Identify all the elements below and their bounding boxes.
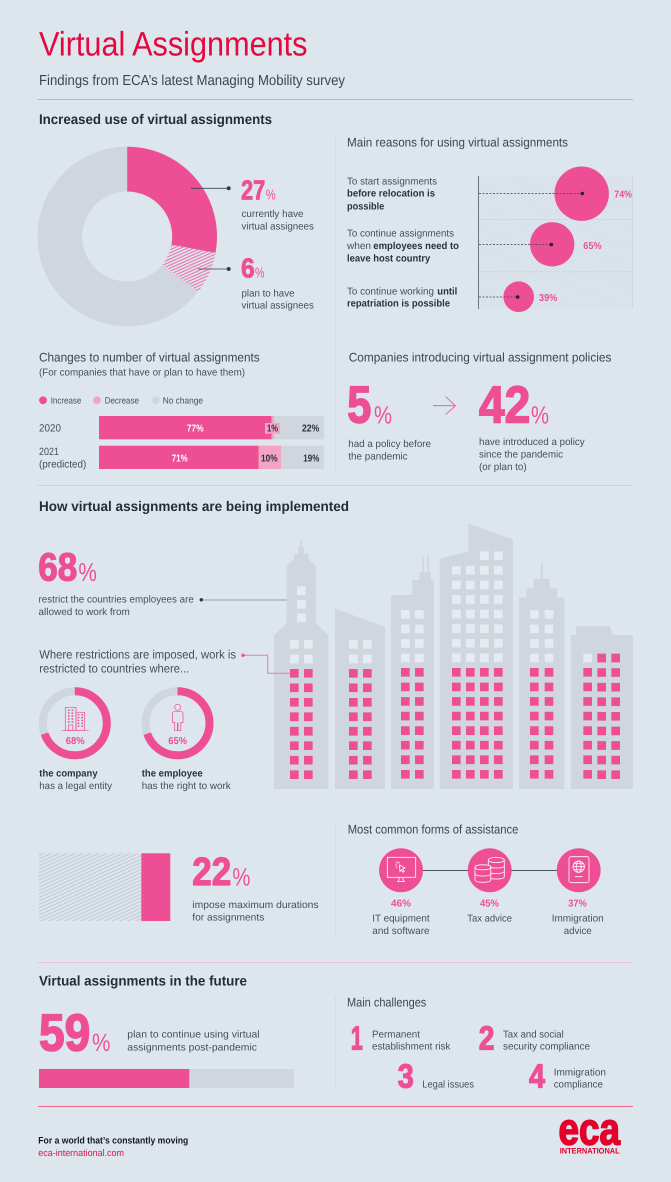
bubble 74%: 74% (614, 190, 632, 201)
icon: monitor (387, 857, 416, 882)
bar 2021: 2021 (39, 446, 59, 458)
item: immigration advice: advice (564, 926, 592, 937)
stat: 6%: virtual assignees (242, 301, 314, 312)
ring: the company 68%: 68% (66, 736, 85, 747)
reason 2 text: leave host country (347, 253, 431, 264)
icon: passport (569, 857, 589, 883)
icon: person (172, 704, 183, 731)
donut segment 27% (127, 147, 217, 253)
challenge 3: Legal issues (422, 1080, 474, 1091)
challenge 2: security compliance (503, 1042, 590, 1053)
stat: 22% (192, 850, 319, 924)
challenge 1: Permanent (372, 1029, 420, 1040)
challenge 1 (351, 1021, 451, 1058)
stat: 59% (39, 1004, 260, 1062)
stat: 42% (479, 377, 585, 473)
bar 2020: 77% (187, 424, 204, 434)
item: immigration advice: 37% (568, 898, 587, 909)
heading: policies: Companies introducing virtual assignment policies (349, 351, 611, 365)
heading: main reasons: Main reasons for using virtual assignments (347, 136, 568, 150)
stat: 5%: 5 (347, 377, 371, 435)
stat: 6% (241, 253, 314, 312)
heading: assistance: Most common forms of assistance (348, 822, 518, 836)
stat: 22%: for assignments (192, 913, 264, 924)
stat: 22%: impose maximum durations (192, 900, 319, 911)
stat: 59%: 59 (39, 1004, 90, 1062)
item: tax advice: 45% (480, 898, 499, 909)
panel: donut chart (37, 147, 230, 326)
text: where restrictions (39, 647, 236, 675)
stat: 42%: have introduced a policy (479, 437, 585, 448)
stat: 68% restrict countries: 68 (38, 546, 77, 590)
stat: 22%: % (232, 863, 250, 891)
stat: 6%: % (255, 266, 265, 282)
reason 1 text: before relocation is (347, 189, 435, 200)
stat: 59%: % (92, 1029, 110, 1057)
text: where restrictions: restricted to countries where... (39, 661, 189, 675)
bar 2020: 22% (302, 424, 319, 434)
reason 1 text: possible (347, 201, 385, 212)
bar 2021 (39, 446, 324, 470)
reason 2 text: To continue assignments (347, 229, 454, 240)
ring: the employee 65%: the employee (142, 769, 203, 780)
ring: the employee 65%: has the right to work (142, 781, 232, 792)
bubble chart (478, 166, 633, 312)
stat: 22%: 22 (192, 850, 231, 894)
stat: 27%: 27 (241, 174, 265, 205)
heading: future: Virtual assignments in the future (39, 972, 247, 988)
stat: 42%: 42 (479, 377, 530, 435)
reason 3 text: To continue working (347, 286, 434, 297)
stat: 59%: assignments post-pandemic (127, 1043, 257, 1054)
subtitle: Findings from ECA’s latest Managing Mobility survey (39, 73, 346, 89)
bar 2020: 2020 (39, 423, 61, 435)
item: IT equipment: 46% (391, 898, 411, 909)
stat: 42%: since the pandemic (479, 449, 563, 460)
stat: 5%: the pandemic (348, 451, 408, 462)
legend: Increase (51, 395, 81, 405)
bubble 74% (479, 166, 632, 221)
heading: increased use: Increased use of virtual assignments (39, 111, 272, 127)
item: tax advice (467, 848, 512, 925)
illustration: city skyline (274, 524, 633, 789)
leader 27% (191, 187, 230, 190)
bar 2021: (predicted) (39, 458, 86, 470)
stat: 5%: had a policy before (348, 439, 431, 450)
stat: 68% restrict countries: allowed to work from (38, 607, 130, 618)
bar 2020: 1% (267, 424, 278, 434)
ring: the company 68% (39, 691, 112, 792)
panel: changes to number (39, 351, 324, 470)
challenge 1: establishment risk (372, 1042, 451, 1053)
item: immigration advice: Immigration (552, 914, 604, 925)
bubble 65% (479, 222, 602, 266)
arrow (433, 397, 455, 414)
donut remainder (37, 147, 217, 326)
donut segment 6% (163, 245, 216, 292)
item: IT equipment (372, 848, 430, 937)
stat: 6%: 6 (241, 253, 255, 284)
stat: 68% restrict countries (38, 546, 194, 618)
logo: ECA International: eca (558, 1104, 621, 1154)
leader 6% (198, 267, 230, 271)
stat: 42%: % (531, 401, 549, 429)
challenge 4: 4 (529, 1059, 545, 1096)
heading: challenges: Main challenges (347, 996, 426, 1010)
stat: 27%: virtual assignees (242, 222, 314, 232)
subheading: changes: (For companies that have or plan to have them) (39, 368, 245, 379)
challenge 2: 2 (479, 1021, 494, 1058)
progress bar 59% (39, 1069, 294, 1088)
challenge 2: Tax and social (503, 1029, 564, 1040)
panel: forms of assistance (348, 822, 604, 937)
icon: coins (475, 857, 504, 882)
legend (39, 395, 203, 405)
stat: 27% (241, 174, 314, 232)
reason 2 text: when (346, 241, 371, 252)
legend: Decrease (105, 395, 139, 405)
bar 2020 (39, 416, 324, 439)
panel: companies introducing policies (347, 351, 611, 473)
bubble 39%: 39% (539, 293, 557, 304)
stat: 6%: plan to have (242, 288, 295, 299)
footer text: eca-international.com (38, 1148, 124, 1159)
stat: 5% (347, 377, 431, 462)
challenge 3: 3 (398, 1059, 414, 1096)
footer text: For a world that’s constantly moving (38, 1135, 188, 1146)
reason 3 text: repatriation is possible (347, 299, 450, 310)
stat: 68% restrict countries: % (78, 557, 97, 587)
leader to skyline (200, 598, 287, 602)
item: IT equipment: and software (372, 926, 430, 937)
stat: 42%: (or plan to) (479, 462, 527, 473)
ring: the employee 65%: 65% (168, 736, 187, 747)
item: immigration advice (552, 848, 604, 937)
bubble 39% (479, 281, 557, 312)
item: IT equipment: IT equipment (372, 914, 430, 925)
reason 1 text (347, 177, 437, 212)
bubble 65%: 65% (583, 241, 602, 252)
stat: 27%: currently have (242, 209, 304, 220)
panel: main reasons (346, 136, 633, 312)
ring: the company 68%: has a legal entity (39, 781, 112, 792)
pink leader (241, 654, 290, 673)
challenge 1: 1 (351, 1021, 363, 1058)
bar 2021: 10% (261, 453, 278, 464)
reason 1 text: To start assignments (347, 177, 437, 188)
reason 3 text: until (437, 286, 458, 297)
reason 3 text (347, 286, 458, 310)
stat: 27%: % (266, 187, 276, 203)
text: where restrictions: Where restrictions are imposed, work is (39, 647, 236, 661)
logo: ECA International: INTERNATIONAL (560, 1147, 620, 1156)
challenge 3 (398, 1059, 474, 1096)
heading: changes: Changes to number of virtual assignments (39, 351, 260, 365)
ring: the employee 65% (142, 691, 232, 792)
challenge 4: compliance (554, 1080, 603, 1091)
heading: how implemented: How virtual assignments are being implemented (39, 498, 349, 514)
legend: No change (163, 395, 203, 405)
footer text (38, 1135, 188, 1159)
ring: the company 68%: the company (39, 769, 98, 780)
title: Virtual Assignments (39, 26, 308, 64)
icon: office building (62, 707, 89, 730)
reason 2 text: employees need to (373, 241, 459, 252)
chart: 22% bar (39, 853, 170, 921)
bar 2021: 71% (172, 453, 188, 464)
challenge 2 (479, 1021, 590, 1058)
challenge 4 (529, 1059, 606, 1096)
item: tax advice: Tax advice (467, 914, 512, 925)
stat: 5%: % (374, 401, 392, 429)
bar 2021: 19% (303, 453, 319, 464)
panel: main challenges (347, 996, 606, 1096)
stat: 68% restrict countries: restrict the countries employees are (38, 594, 194, 605)
challenge 4: Immigration (554, 1067, 606, 1078)
reason 2 text (346, 229, 459, 264)
stat: 59%: plan to continue using virtual (127, 1029, 260, 1040)
